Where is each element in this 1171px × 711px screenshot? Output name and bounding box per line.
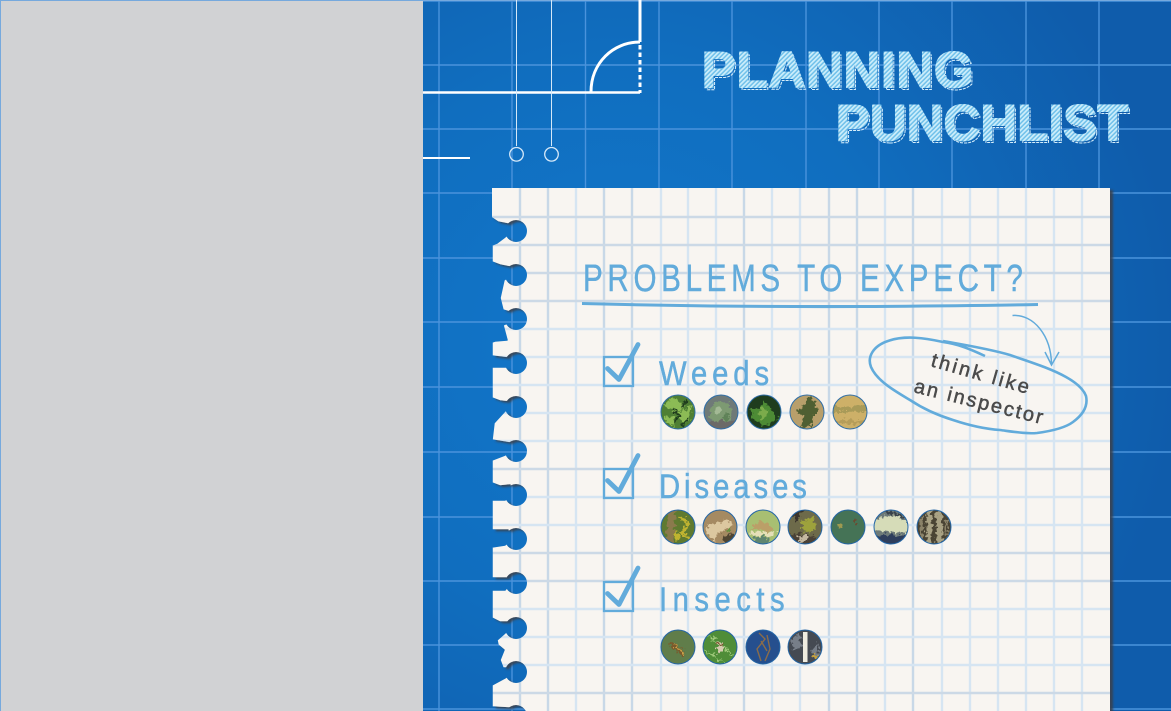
- weeds photo row: [660, 394, 868, 430]
- photo: insect 3: [745, 629, 781, 665]
- title: [702, 42, 1130, 154]
- callout arrow: [1012, 315, 1059, 365]
- photo: disease 2: [702, 510, 738, 544]
- photo: disease 5: [830, 510, 866, 544]
- blueprint background panel: [423, 0, 1171, 711]
- label: insects: Insects: [659, 580, 785, 619]
- checkbox: weeds: [604, 344, 638, 386]
- photo: disease 1: [660, 510, 696, 544]
- photo: insect 4: [788, 630, 822, 664]
- photo: disease 3: [746, 510, 780, 544]
- insects photo row: [660, 630, 822, 664]
- heading underline: [582, 304, 1038, 307]
- photo: weed 4: [790, 394, 824, 430]
- diseases photo row: [660, 510, 952, 544]
- blueprint door drawing: [423, 0, 640, 158]
- label: weeds: Weeds: [659, 354, 769, 393]
- title line: PLANNING: PLANNING: [702, 42, 973, 98]
- label: diseases: Diseases: [659, 467, 807, 506]
- photo: weed 1: [660, 394, 696, 430]
- blueprint dimension markers: [510, 0, 558, 161]
- photo: weed 3: [746, 394, 782, 430]
- heading: problems to expect: PROBLEMS TO EXPECT?: [583, 258, 1023, 300]
- title line: PLANNING: PLANNING: [704, 44, 975, 100]
- checkbox: insects: [604, 568, 638, 611]
- left gray panel: [0, 0, 423, 711]
- photo: disease 4: [788, 510, 822, 544]
- callout text: an inspector: [912, 376, 1046, 429]
- photo: insect 2: [702, 630, 738, 664]
- photo: disease 7: [916, 510, 952, 544]
- title line: PUNCHLIST: PUNCHLIST: [838, 98, 1130, 154]
- callout text: think like: [929, 350, 1033, 399]
- photo: insect 1: [660, 630, 696, 664]
- photo: disease 6: [874, 510, 908, 544]
- callout text: [912, 350, 1046, 429]
- checkbox: diseases: [604, 456, 638, 498]
- photo: weed 2: [704, 394, 738, 430]
- title line: PUNCHLIST: PUNCHLIST: [836, 95, 1128, 151]
- photo: weed 5: [832, 394, 868, 430]
- callout oval: [870, 338, 1086, 433]
- torn notebook paper: [492, 188, 1110, 711]
